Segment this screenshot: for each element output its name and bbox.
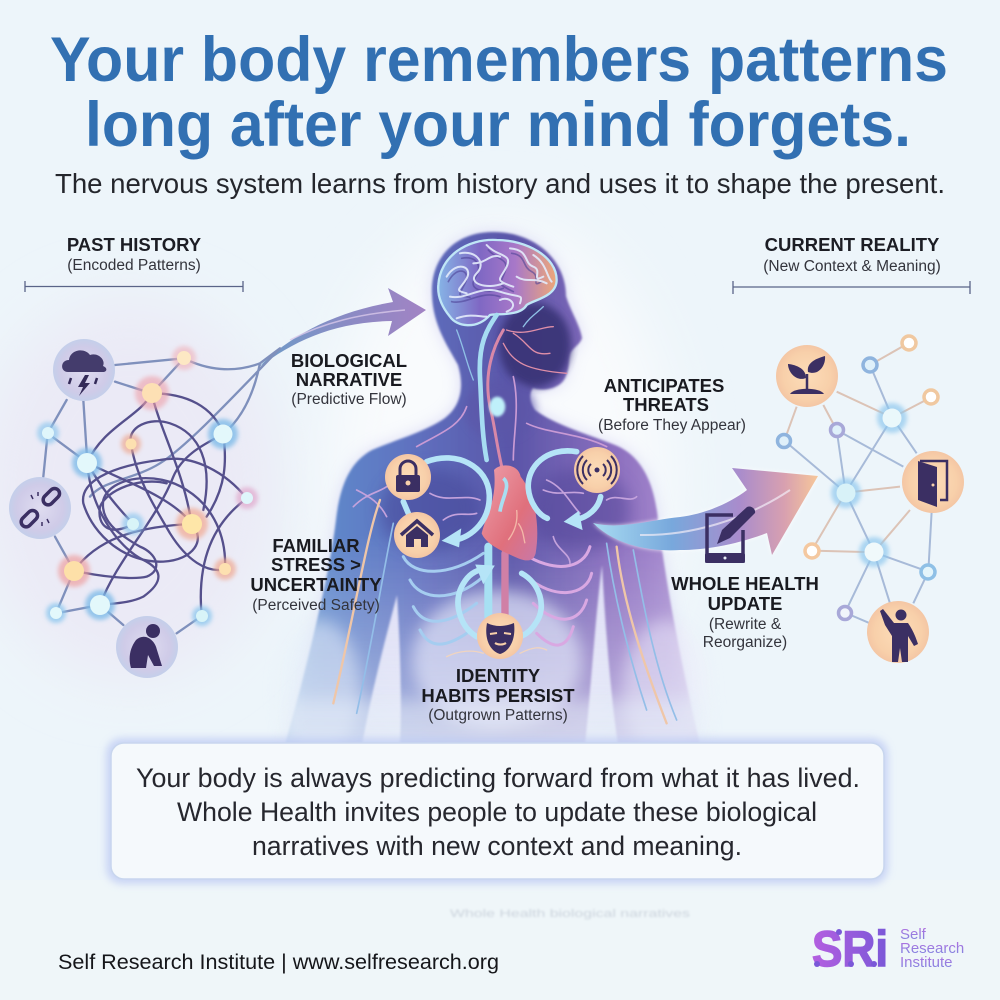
label: anticipates threats: (Before They Appear) xyxy=(598,417,746,434)
label: identity habits: (Outgrown Patterns) xyxy=(428,707,568,724)
icon: sprout xyxy=(776,345,838,407)
network: past history xyxy=(9,339,280,678)
body figure xyxy=(280,232,710,760)
arrow: whole health update xyxy=(593,468,818,555)
title: long after your mind forgets. xyxy=(85,90,911,160)
heading: current reality xyxy=(733,234,970,294)
label: anticipates threats: ANTICIPATES xyxy=(604,375,724,396)
callout panel: narratives with new context and meaning. xyxy=(252,831,742,861)
icon: padlock xyxy=(385,454,431,500)
circular arrows xyxy=(403,451,601,637)
heading: current reality: (New Context & Meaning) xyxy=(763,258,941,275)
icon: house xyxy=(394,512,440,558)
label: biological narrative: BIOLOGICAL xyxy=(291,350,407,371)
label: whole health update: (Rewrite & xyxy=(709,616,782,633)
logo: Research xyxy=(900,940,964,957)
label: familiar stress: FAMILIAR xyxy=(272,535,360,556)
footer text: Self Research Institute | www.selfresearch.org xyxy=(58,951,499,974)
label: familiar stress: STRESS > xyxy=(271,554,361,575)
heart xyxy=(482,465,537,560)
title xyxy=(50,25,948,160)
heading: past history: PAST HISTORY xyxy=(67,234,202,255)
heading: past history xyxy=(25,234,243,292)
label: identity habits xyxy=(421,665,575,724)
subtitle: The nervous system learns from history and uses it to shape the present. xyxy=(55,168,945,199)
logo: Self xyxy=(900,926,927,943)
logo: Institute xyxy=(900,954,953,971)
spinal cord and neck vessels xyxy=(417,307,607,473)
callout panel: Your body is always predicting forward from what it has lived. xyxy=(136,763,860,793)
heading: past history: (Encoded Patterns) xyxy=(67,257,201,274)
icon: broken chain xyxy=(9,477,71,539)
label: anticipates threats xyxy=(598,375,746,434)
label: identity habits: IDENTITY xyxy=(456,665,541,686)
label: biological narrative: NARRATIVE xyxy=(296,369,402,390)
icon: raised arm person xyxy=(867,601,929,663)
icon: tablet and pen xyxy=(705,506,755,563)
label: familiar stress: UNCERTAINTY xyxy=(250,574,382,595)
connections xyxy=(784,343,932,623)
logo: SRi xyxy=(812,921,888,977)
icon: door xyxy=(902,451,964,513)
label: whole health update: Reorganize) xyxy=(703,634,787,651)
nodes xyxy=(778,336,938,620)
body silhouette xyxy=(280,232,710,760)
body glow xyxy=(315,228,676,733)
faint residual text: Whole Health biological narratives xyxy=(450,908,691,920)
label: whole health update: WHOLE HEALTH xyxy=(671,573,819,594)
callout panel: Whole Health invites people to update these biological xyxy=(177,797,817,827)
icon: mask xyxy=(477,613,523,659)
label: familiar stress xyxy=(250,535,382,614)
title: Your body remembers patterns xyxy=(50,25,948,95)
label: biological narrative: (Predictive Flow) xyxy=(291,391,407,408)
icon: sitting person xyxy=(116,616,178,678)
brain xyxy=(438,240,557,325)
label: familiar stress: (Perceived Safety) xyxy=(252,597,380,614)
tangled connections xyxy=(43,348,280,633)
icon: signal xyxy=(574,447,620,493)
callout panel xyxy=(106,738,888,884)
chest vessels and ribs xyxy=(333,480,677,723)
label: biological narrative xyxy=(291,350,407,408)
network: current reality xyxy=(776,336,964,663)
heading: current reality: CURRENT REALITY xyxy=(765,234,940,255)
nodes xyxy=(37,346,258,626)
logo xyxy=(812,921,964,977)
label: identity habits: HABITS PERSIST xyxy=(421,685,575,706)
icon: storm cloud xyxy=(53,339,115,401)
arrow: predictive flow xyxy=(258,288,426,368)
label: whole health update xyxy=(671,573,819,651)
label: anticipates threats: THREATS xyxy=(623,394,709,415)
label: whole health update: UPDATE xyxy=(708,593,782,614)
